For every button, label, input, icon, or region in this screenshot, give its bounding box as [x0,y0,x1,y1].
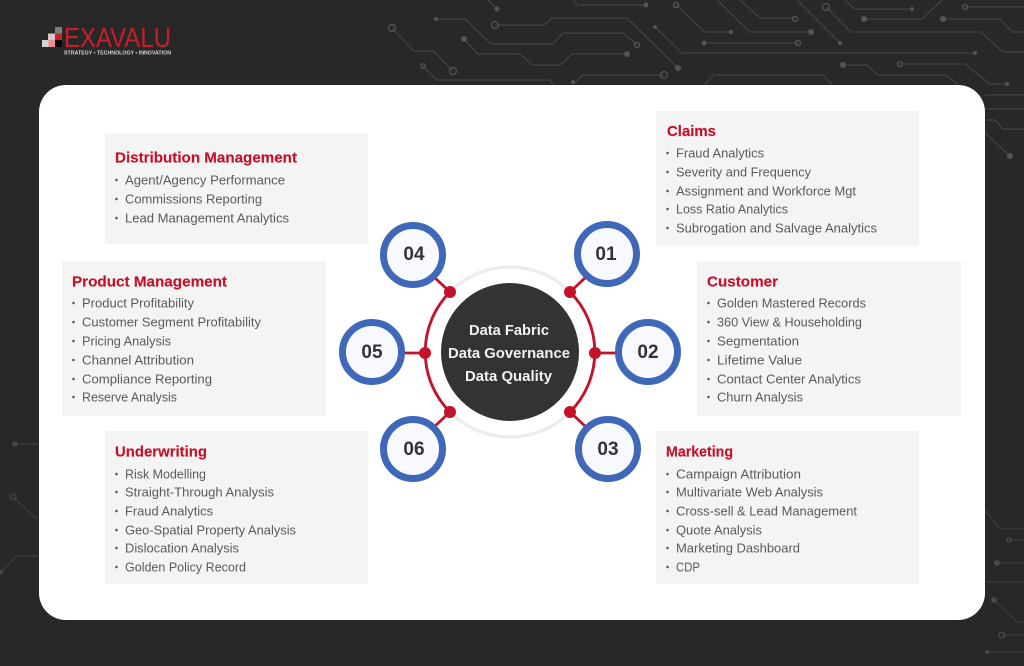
marketing list: CDP [676,560,700,574]
center labels [448,323,570,385]
node 05: 05 [361,342,383,363]
claims list [666,146,877,236]
customer list: Churn Analysis [717,390,803,404]
center labels: Data Fabric [469,323,549,339]
distribution heading: Distribution Management [115,150,297,166]
claims panel background [656,111,919,246]
outer grey ring [425,267,595,437]
distribution list: Agent/Agency Performance [125,172,285,188]
underwriting heading: Underwriting [115,444,207,460]
logo wordmark: EXAVALU [64,22,171,53]
claims heading: Claims [667,123,716,140]
node 02 [618,322,678,382]
center labels: Data Governance [448,346,570,362]
logo icon: pixel squares [42,27,62,47]
node 02: 02 [637,342,659,363]
customer panel background [697,261,961,416]
customer list: Segmentation [717,334,799,348]
logo tagline: STRATEGY • TECHNOLOGY • INNOVATION [64,50,171,56]
customer list: Golden Mastered Records [717,296,866,310]
claims list: Fraud Analytics [676,146,764,160]
underwriting list: Golden Policy Record [125,560,246,574]
panel: underwriting [105,431,368,584]
product list: Customer Segment Profitability [82,314,261,330]
claims list: Loss Ratio Analytics [676,202,788,216]
underwriting list: Risk Modelling [125,466,206,482]
claims list: Severity and Frequency [676,164,811,180]
claims list: Subrogation and Salvage Analytics [676,220,877,236]
underwriting list: Fraud Analytics [125,504,213,518]
marketing panel background [656,431,919,584]
product list: Reserve Analysis [82,390,177,404]
customer heading: Customer [707,274,778,290]
distribution list [115,172,289,226]
panel: distribution management [105,133,368,244]
distribution panel background [105,133,368,244]
panel: product management [62,261,326,416]
distribution list: Lead Management Analytics [125,210,289,226]
marketing list: Cross-sell & Lead Management [676,504,857,518]
claims list: Assignment and Workforce Mgt [676,184,856,198]
product list: Pricing Analysis [82,334,171,348]
logo: Exavalu [42,22,171,56]
product panel background [62,261,326,416]
underwriting list: Geo-Spatial Property Analysis [125,522,296,538]
node 01 [578,224,636,284]
node 03: 03 [597,439,619,460]
marketing list: Marketing Dashboard [676,540,800,556]
underwriting panel background [105,431,368,584]
underwriting list: Straight-Through Analysis [125,484,274,500]
node 01: 01 [595,244,617,265]
node 04 [384,226,442,284]
customer list: Lifetime Value [717,352,802,368]
node 03 [578,420,638,478]
product list: Compliance Reporting [82,372,212,386]
product heading: Product Management [72,274,227,290]
marketing heading: Marketing [666,444,733,460]
node 06 [384,420,442,478]
marketing list: Campaign Attribution [676,466,801,482]
center dark circle [441,283,579,421]
underwriting list: Dislocation Analysis [125,540,239,556]
node 05 [342,322,402,382]
customer list: Contact Center Analytics [717,372,861,386]
node 06: 06 [403,439,425,460]
panel: claims [656,111,919,246]
customer list: 360 View & Householding [717,314,862,330]
marketing list [666,466,857,574]
product list [72,296,261,404]
distribution list: Commissions Reporting [125,192,262,206]
hub diagram [342,224,678,478]
customer list [707,296,866,404]
marketing list: Multivariate Web Analysis [676,484,823,500]
marketing list: Quote Analysis [676,522,762,538]
center labels: Data Quality [465,369,552,385]
node 04: 04 [403,244,425,265]
panel: customer [697,261,961,416]
white main card [39,85,985,620]
red connector arcs and spokes [402,277,618,427]
underwriting list [115,466,296,574]
product list: Channel Attribution [82,352,194,368]
panel: marketing [656,431,919,584]
red connector dots [419,286,601,418]
product list: Product Profitability [82,296,194,310]
